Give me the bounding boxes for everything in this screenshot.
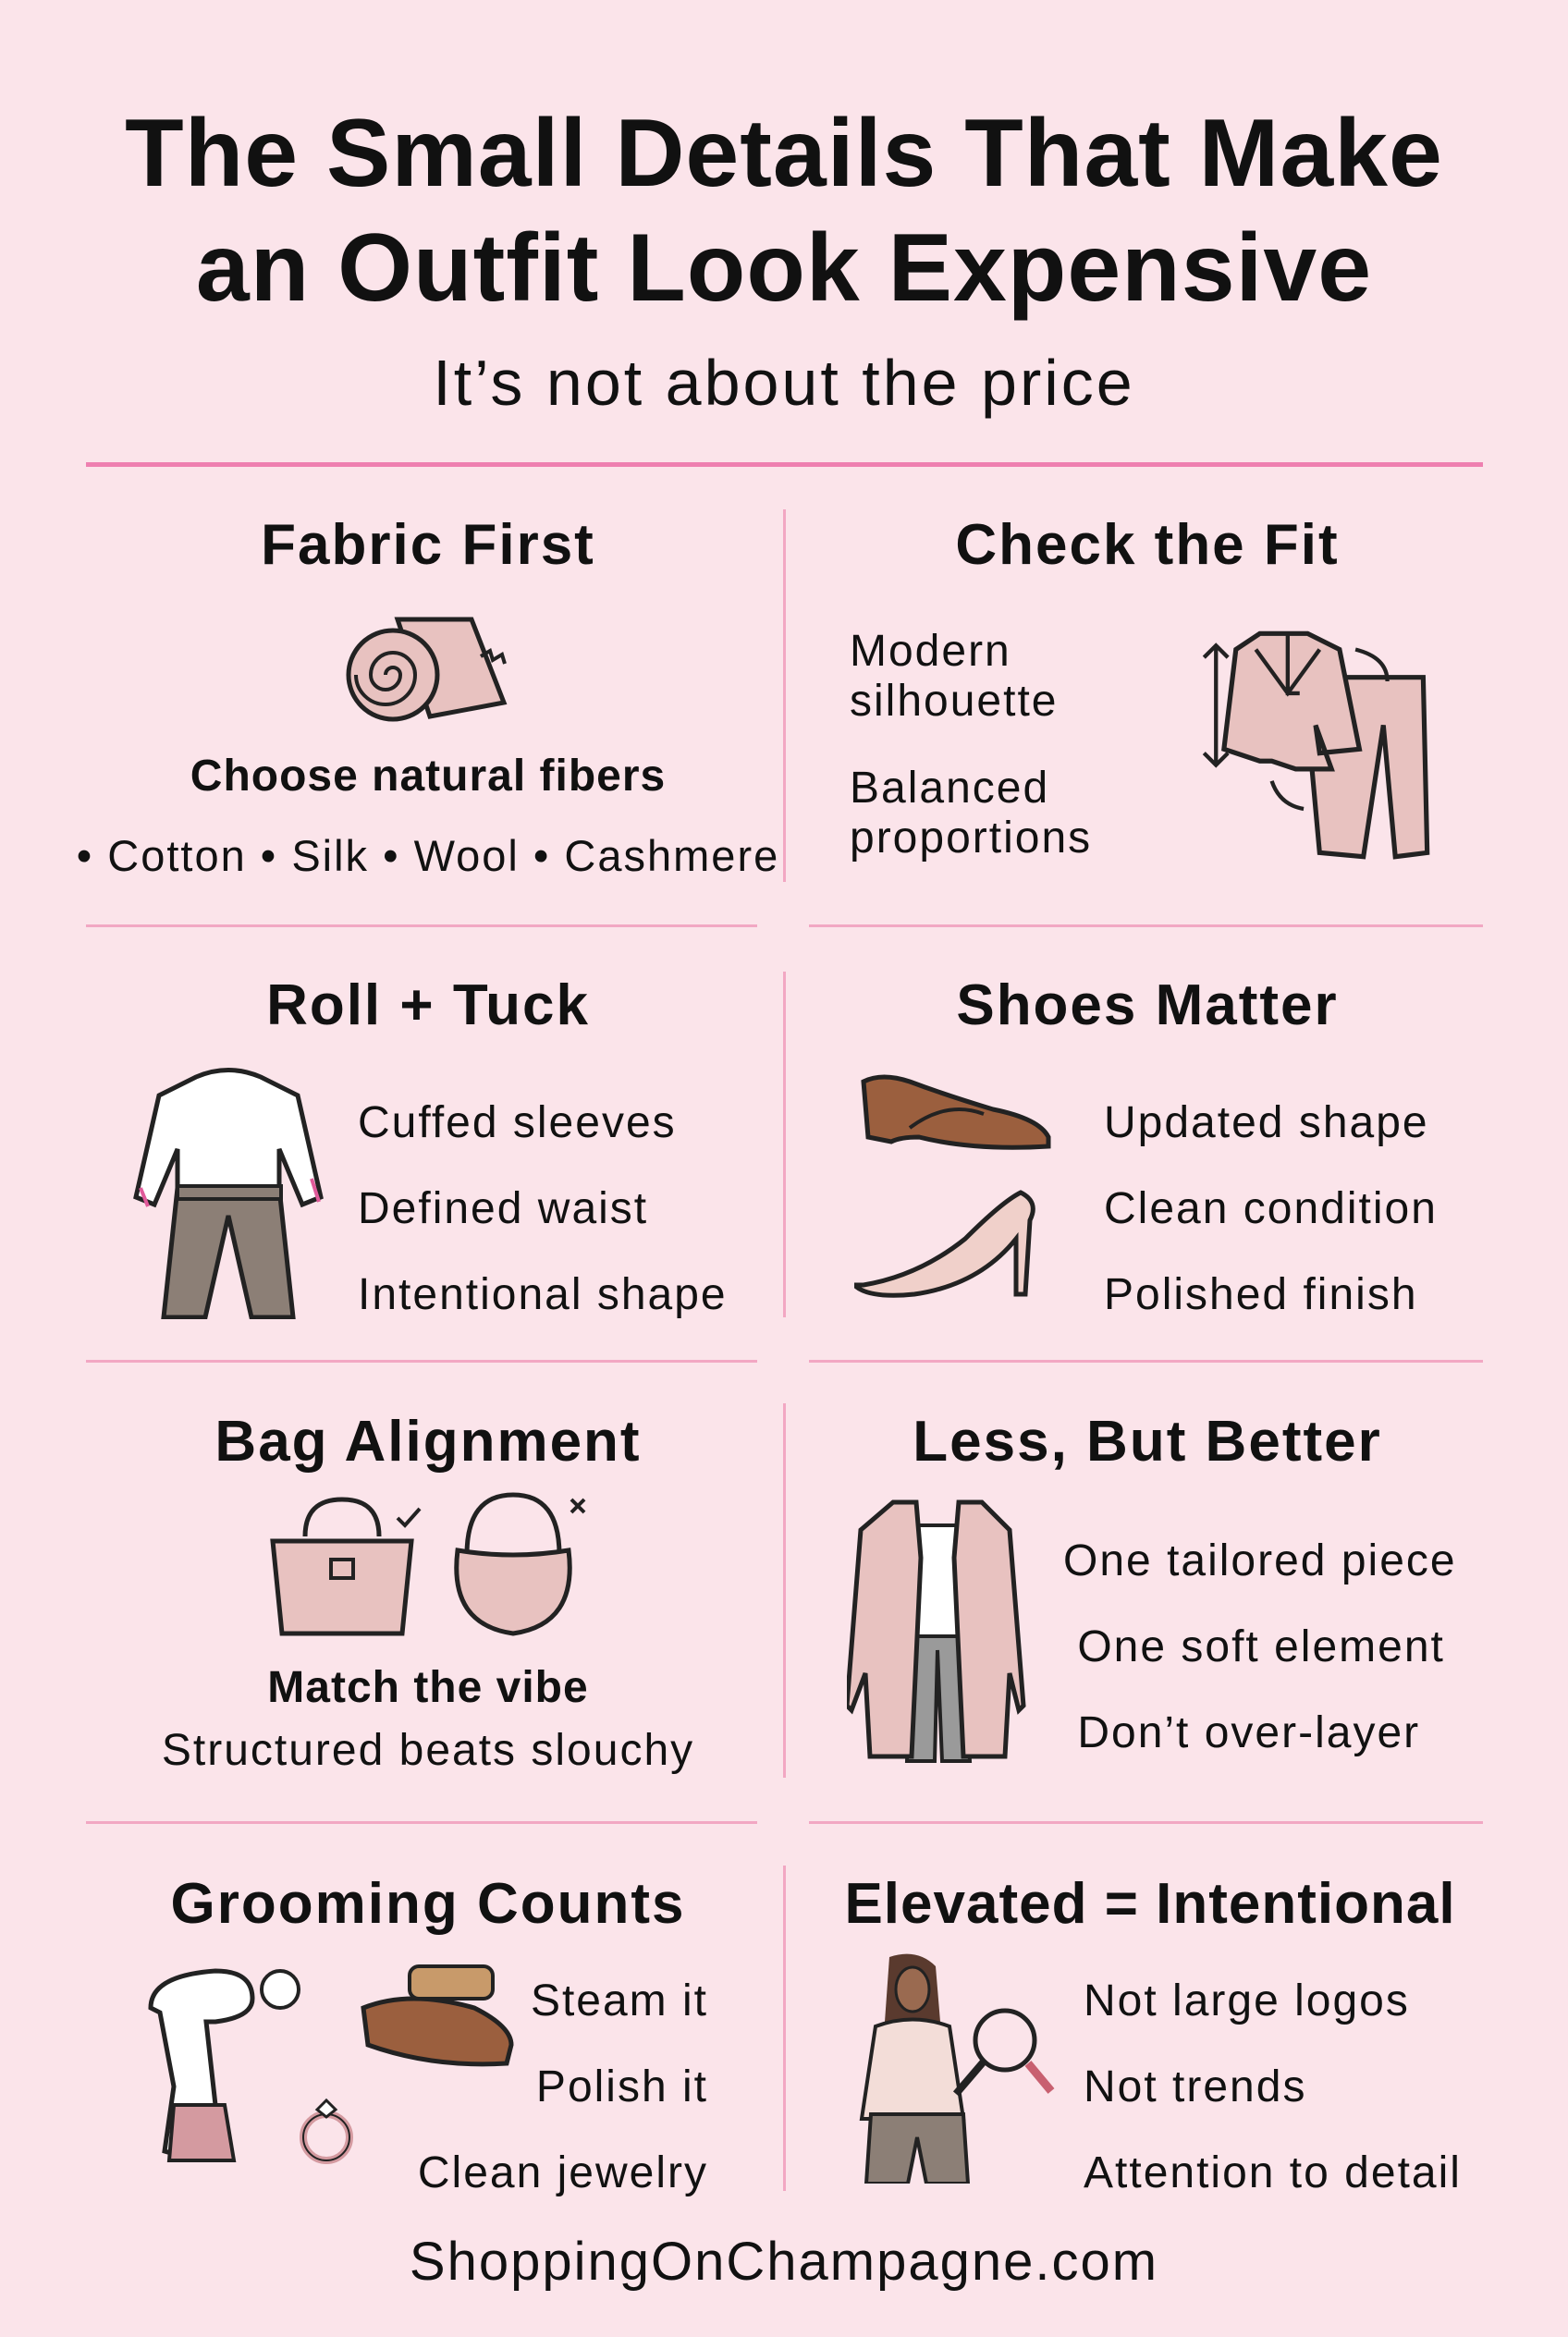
text: grooming points: Clean jewelry <box>418 2148 708 2197</box>
text: structured beats slouchy: Structured beats slouchy <box>162 1726 694 1775</box>
text: shoe points <box>1104 1098 1438 1319</box>
text: shoe points: Clean condition <box>1104 1184 1438 1233</box>
text: choose natural fibers: Choose natural fibers <box>190 752 666 801</box>
text: grooming points <box>418 1976 708 2197</box>
icon: structured and slouchy bags <box>270 1492 586 1636</box>
text: fiber list: • Cotton • Silk • Wool • Cashmere <box>77 831 779 880</box>
heading: grooming counts: Grooming Counts <box>171 1872 685 1936</box>
icon: steamer, brush and ring <box>148 1964 514 2164</box>
text: fit points: Balanced <box>850 764 1049 813</box>
text: shoe points: Polished finish <box>1104 1270 1418 1319</box>
heading: fabric first: Fabric First <box>261 513 595 577</box>
panel: fabric first <box>77 513 779 880</box>
heading: bag alignment: Bag Alignment <box>214 1410 642 1474</box>
title: an Outfit Look Expensive <box>196 214 1372 322</box>
text: elevated points: Not trends <box>1084 2062 1306 2111</box>
text: elevated points <box>1084 1976 1462 2197</box>
icon: shoes <box>854 1074 1050 1298</box>
text: fit points: silhouette <box>850 677 1058 726</box>
text: roll tuck points: Intentional shape <box>358 1270 728 1319</box>
text: less points: One soft element <box>1077 1622 1445 1671</box>
title <box>125 100 1443 322</box>
panel: grooming counts <box>148 1872 708 2197</box>
icon: woman with magnifier <box>860 1954 1054 2184</box>
text: elevated points: Not large logos <box>1084 1976 1410 2025</box>
heading: roll + tuck: Roll + Tuck <box>266 973 590 1037</box>
heading: check the fit: Check the Fit <box>955 513 1340 577</box>
panel: less but better <box>847 1410 1457 1763</box>
panel: elevated = intentional <box>844 1872 1462 2197</box>
footer: website: ShoppingOnChampagne.com <box>410 2232 1158 2292</box>
icon: tucked shirt figure <box>133 1068 324 1319</box>
heading: elevated = intentional: Elevated = Intentional <box>844 1872 1456 1936</box>
text: grooming points: Steam it <box>531 1976 708 2025</box>
subtitle: It’s not about the price <box>433 347 1135 419</box>
text: less points <box>1063 1536 1457 1757</box>
icon: fabric roll <box>346 618 507 721</box>
panel: roll + tuck <box>133 973 728 1319</box>
text: match the vibe: Match the vibe <box>267 1663 589 1712</box>
panel: check the fit <box>850 513 1429 863</box>
text: elevated points: Attention to detail <box>1084 2148 1462 2197</box>
panel: bag alignment <box>162 1410 694 1775</box>
icon: suit <box>1202 630 1429 860</box>
text: fit points: Modern <box>850 627 1011 676</box>
text: roll tuck points: Cuffed sleeves <box>358 1098 677 1147</box>
text: roll tuck points <box>358 1098 728 1319</box>
icon: coat <box>847 1499 1026 1763</box>
text: less points: Don’t over-layer <box>1077 1708 1420 1757</box>
text: grooming points: Polish it <box>536 2062 708 2111</box>
text: roll tuck points: Defined waist <box>358 1184 648 1233</box>
title: The Small Details That Make <box>125 100 1443 207</box>
panel: shoes matter <box>854 973 1438 1319</box>
text: fit points: proportions <box>850 814 1092 863</box>
text: fit points <box>850 627 1092 863</box>
text: shoe points: Updated shape <box>1104 1098 1429 1147</box>
heading: less but better: Less, But Better <box>913 1410 1382 1474</box>
text: less points: One tailored piece <box>1063 1536 1457 1585</box>
heading: shoes matter: Shoes Matter <box>956 973 1339 1037</box>
